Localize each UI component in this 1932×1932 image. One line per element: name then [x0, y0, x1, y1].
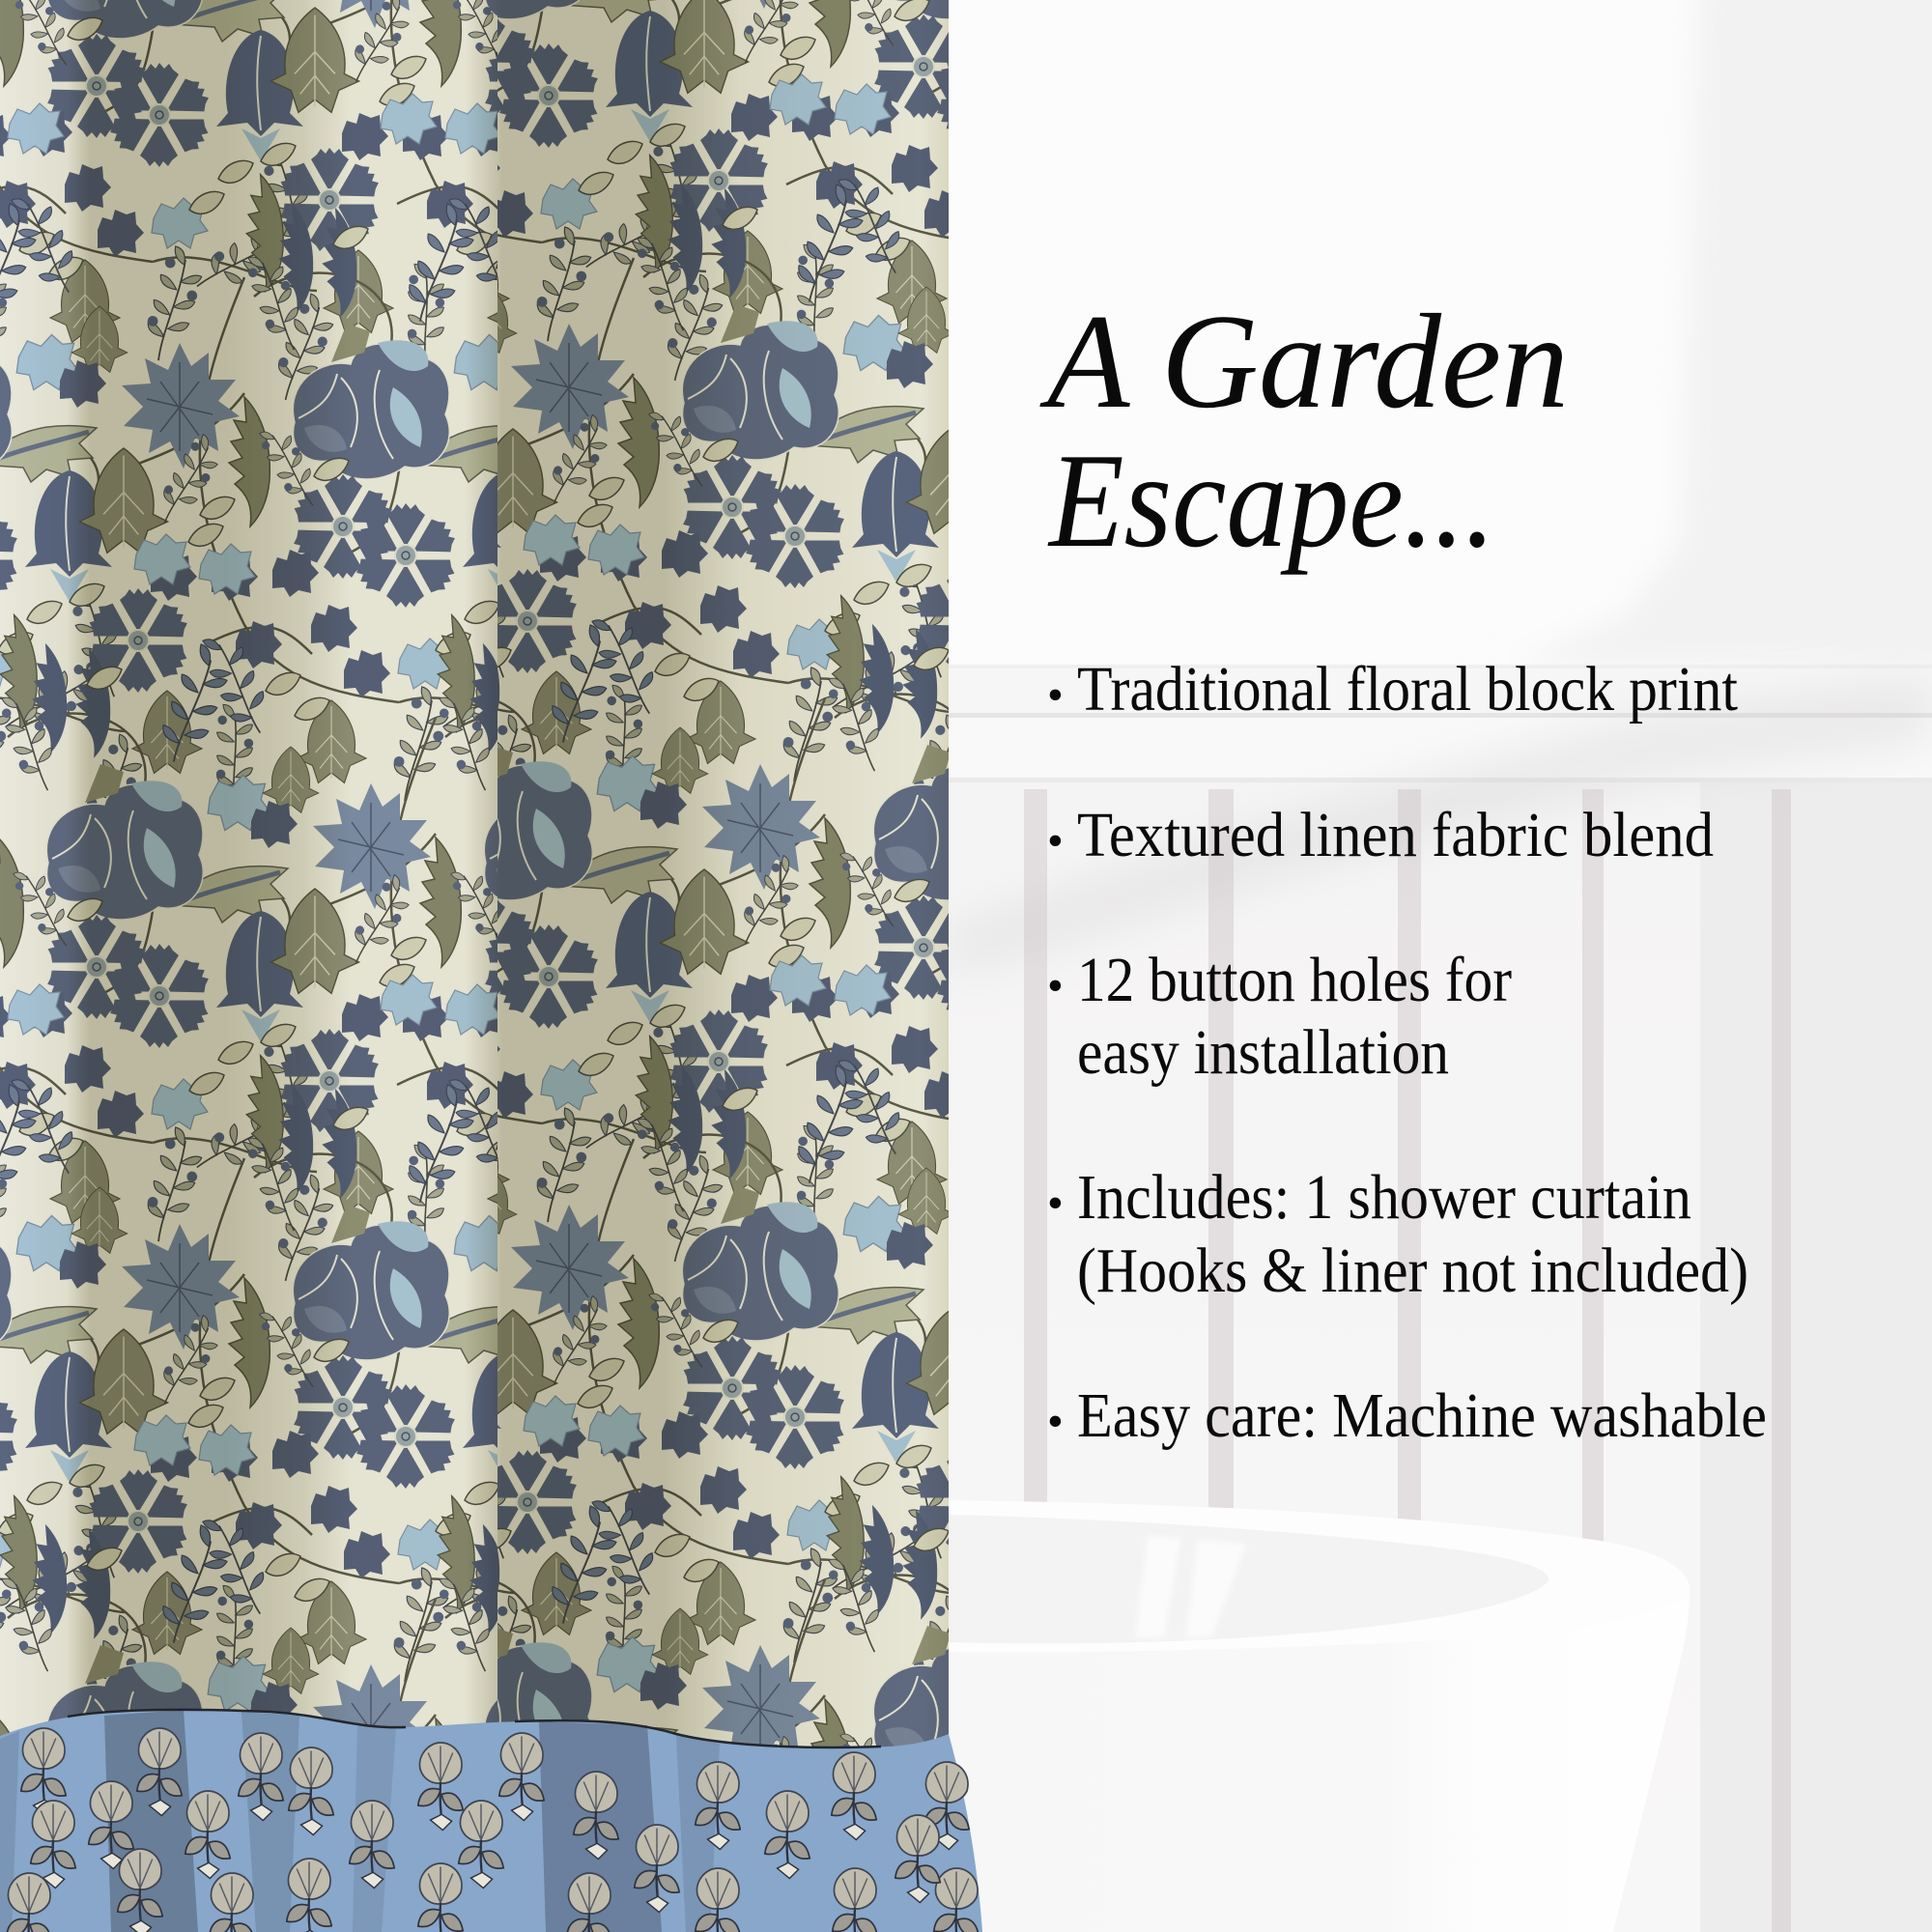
- bullet: button holes: 12 button holes for: [1077, 945, 1512, 1015]
- bullet: floral print: •: [1047, 669, 1064, 721]
- ruffle fold shading: [0, 1710, 720, 1932]
- wall background: [927, 0, 1932, 1932]
- upper right wall shade: [1507, 0, 1932, 667]
- wainscoting with chair rail: [949, 665, 1932, 1932]
- curtain fabric right panel: [497, 0, 949, 1748]
- curtain fabric left panel: [0, 0, 497, 1748]
- bullet: includes: Includes: 1 shower curtain: [1077, 1162, 1691, 1233]
- bullet: button holes: easy installation: [1077, 1017, 1449, 1088]
- bullet: floral print: Traditional floral block print: [1077, 654, 1738, 724]
- bullet: button holes: •: [1047, 960, 1064, 1011]
- bullet: includes: (Hooks & liner not included): [1077, 1236, 1748, 1306]
- tub interior: [949, 1515, 1548, 1643]
- bathtub: [949, 1500, 1690, 1932]
- bullet: easy care: Easy care: Machine washable: [1077, 1380, 1767, 1451]
- bullet: linen blend: Textured linen fabric blend: [1077, 800, 1714, 870]
- ruffle flower sprigs: [7, 1728, 979, 1932]
- curtain fold shading: [0, 0, 949, 1748]
- bullet: includes: [1047, 1162, 1748, 1306]
- feature list: [1047, 654, 1767, 1451]
- bullet: includes: •: [1047, 1178, 1064, 1229]
- floral curtain: [0, 0, 949, 1748]
- panel grooves: [1024, 789, 1791, 1932]
- title: [1039, 287, 1569, 576]
- soft window shadow across wall: [949, 676, 1932, 976]
- bullet: linen blend: •: [1047, 815, 1064, 867]
- bullet: button holes: [1047, 945, 1512, 1088]
- title: Escape...: [1047, 426, 1495, 576]
- ruffle hem: [0, 1709, 982, 1932]
- tub rim front: [949, 1500, 1690, 1652]
- bullet: easy care: •: [1047, 1396, 1064, 1447]
- title: A Garden: [1039, 287, 1569, 437]
- ruffle seam: [68, 1710, 881, 1747]
- tub interior reflections: [1135, 1536, 1246, 1638]
